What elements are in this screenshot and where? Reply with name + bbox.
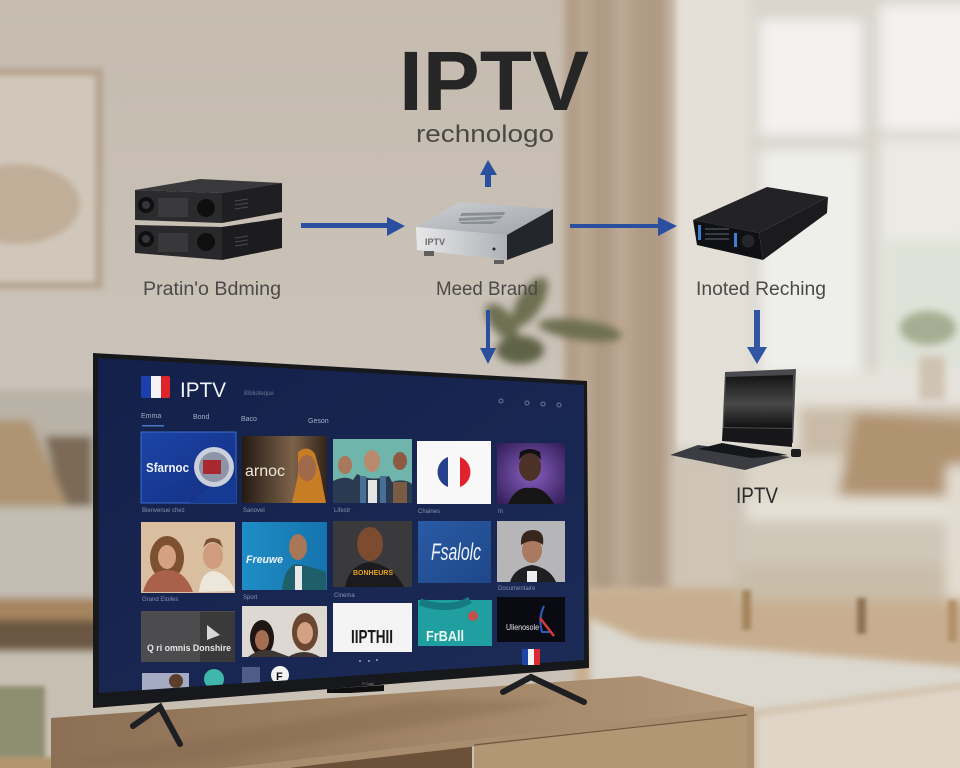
- tile 15: Ulienosole: Ulienosole: [506, 623, 539, 632]
- label: laptop IPTV: IPTV: [736, 483, 778, 508]
- tile 9: Fsalolc: Fsalolc: [431, 539, 481, 566]
- floor right: [575, 588, 960, 768]
- screen logo IPTV: IPTV: [180, 379, 226, 402]
- label: Meed Brand: Meed Brand: [436, 279, 538, 300]
- plant right: [900, 311, 956, 400]
- tv cabinet: [51, 676, 754, 768]
- caption row 1: In: [498, 509, 503, 515]
- tile 5: man on purple: [497, 443, 565, 504]
- flag: screen bottom: [522, 649, 540, 665]
- tv stand legs: [133, 677, 584, 744]
- caption row 2: Sport: [243, 595, 258, 601]
- caption row 1: Sanovel: [243, 508, 265, 514]
- tile 7: Freuwe: Freuwe: [246, 554, 283, 566]
- tile 13: Nfethlli: IIPTHII: [351, 627, 393, 647]
- screen tabs: Bond: [193, 414, 209, 421]
- tile 6: two people: [141, 522, 235, 593]
- arrow: middle box to TV: [480, 310, 496, 364]
- tile 11: grey drama: Q ri omnis Donshire: [147, 643, 231, 653]
- sofa left: [0, 390, 100, 650]
- arrow: right box to laptop: [747, 310, 767, 364]
- floor left: [0, 640, 200, 768]
- sheer curtain base: [676, 460, 738, 590]
- tile 9: Fsalolc: [418, 521, 491, 583]
- rug: [590, 618, 960, 712]
- caption row 1: [142, 508, 503, 515]
- tile 10: man portrait: [497, 521, 565, 582]
- screen tabs: Geson: [308, 418, 329, 425]
- wall painting: [0, 68, 103, 289]
- device: black receiver: [693, 187, 828, 260]
- tile 8: laughing man: BONHEURS: [353, 570, 393, 577]
- caption row 2: Grand Etoiles: [142, 597, 178, 603]
- tile 13: Nfethlli: [333, 603, 412, 652]
- screen tabs: [141, 413, 329, 426]
- tile 4: French flag circle: [417, 441, 491, 504]
- laptop: [670, 369, 801, 470]
- tv logo: F.Cast: [362, 681, 375, 686]
- tile 8: laughing man: [333, 521, 412, 587]
- floor lower right: [755, 684, 960, 768]
- tile 2: arnoc: arnoc: [245, 463, 285, 480]
- curtain: [562, 0, 676, 590]
- television: [93, 353, 589, 708]
- caption row 2: Documentaire: [498, 586, 536, 592]
- label: Pratino Bdming: Pratin'o Bdming: [143, 279, 281, 300]
- caption row 2: Cinema: [334, 593, 355, 599]
- tv screen: [98, 358, 584, 693]
- tv bottom bar button: [327, 685, 384, 693]
- device: stacked server boxes: [135, 179, 282, 260]
- tile 14: FrBAll: [418, 600, 492, 646]
- plant behind tv: [479, 272, 623, 364]
- tile 2: arnoc: [242, 436, 327, 503]
- caption row 1: Chaines: [418, 509, 440, 515]
- tile 12: two women: [242, 606, 327, 657]
- screen status icons: [499, 399, 561, 407]
- armchair right: [738, 408, 960, 601]
- tile 3: three men: [333, 439, 412, 503]
- screen tabs: Baco: [241, 416, 257, 423]
- subtitle: rechnologo: [416, 121, 554, 148]
- tile 11: grey drama: [141, 611, 235, 662]
- arrow: middle box to right box: [570, 217, 677, 236]
- window: [668, 0, 960, 450]
- tile 7: Freuwe: [242, 522, 327, 590]
- arrow: source to middle box: [301, 217, 405, 236]
- tv bezel: [93, 353, 589, 708]
- arrow: up to title: [480, 160, 497, 187]
- plant foreground left: [0, 686, 70, 768]
- caption row 2: [142, 586, 536, 603]
- bottom row thumbnails: [142, 666, 289, 690]
- tile 1: Sfarnoc: [141, 432, 236, 503]
- armchair legs: [742, 590, 957, 642]
- screen tabs: Emma: [141, 413, 161, 420]
- device: silver box: IPTV: [425, 237, 445, 247]
- bottom row thumbnails: F: [276, 671, 283, 683]
- device: silver box: [416, 202, 553, 264]
- tile 1: Sfarnoc: Sfarnoc: [146, 460, 189, 475]
- tile 14: FrBAll: FrBAll: [426, 628, 464, 645]
- flag: screen header: [141, 376, 170, 398]
- label: Inoted Reching: Inoted Reching: [696, 279, 826, 300]
- caption row 1: Lifestr: [334, 508, 350, 514]
- caption row 1: Bienvenue chez: [142, 508, 185, 514]
- title: IPTV: IPTV: [399, 34, 589, 128]
- tile 15: Ulienosole: [497, 597, 565, 642]
- pager dots: [359, 659, 378, 662]
- screen header caption: Biblioteque: [244, 391, 274, 397]
